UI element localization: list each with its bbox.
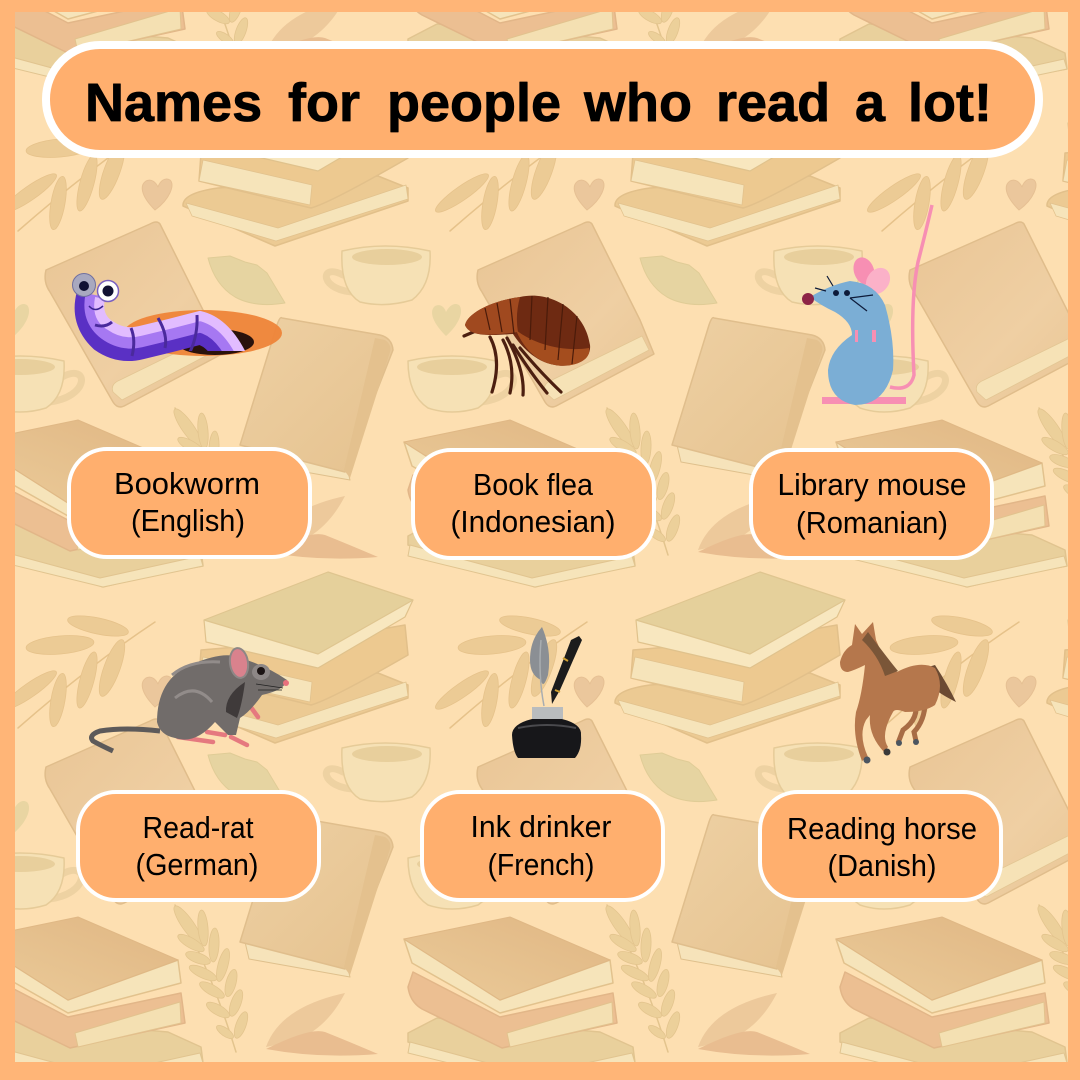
label: Ink drinker: Ink drinker: [470, 809, 612, 844]
icon: ink and quill: [512, 627, 582, 758]
title: lot!: [908, 73, 992, 133]
label: Library mouse: Library mouse: [778, 467, 966, 502]
label: Bookworm: (English): [131, 503, 245, 538]
icon: horse: [840, 622, 956, 764]
label: Ink drinker: (French): [488, 847, 594, 882]
label: Library mouse: [751, 450, 992, 558]
title: Names: [85, 73, 262, 133]
label: Read-rat: Read-rat: [142, 810, 254, 845]
label: Read-rat: (German): [136, 847, 258, 882]
title: [46, 45, 1039, 154]
title: people: [387, 73, 561, 133]
label: Read-rat: [78, 792, 319, 900]
label: Reading horse: [760, 792, 1001, 900]
icon: bookworm: [72, 273, 282, 361]
label: Reading horse: Reading horse: [787, 811, 977, 846]
label: Bookworm: [69, 449, 310, 557]
title: who: [583, 73, 692, 133]
label: Reading horse: (Danish): [828, 848, 936, 883]
icon: flea: [464, 296, 590, 395]
title: read: [716, 73, 830, 133]
label: Book flea: [413, 450, 654, 558]
label: Book flea: (Indonesian): [450, 504, 616, 539]
label: Ink drinker: [422, 792, 663, 900]
label: Bookworm: Bookworm: [114, 466, 260, 501]
icon: library mouse: [802, 205, 932, 405]
title: for: [288, 73, 360, 133]
icon: rat: [92, 647, 289, 751]
title: a: [855, 73, 886, 133]
label: Book flea: Book flea: [473, 467, 594, 502]
label: Library mouse: (Romanian): [796, 505, 948, 540]
